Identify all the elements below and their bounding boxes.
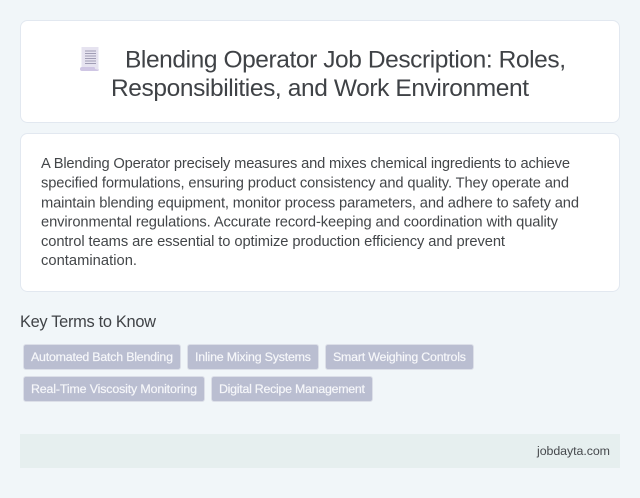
text block: description: environmental regulations. Accurate record-keeping and coordination with quality xyxy=(41,214,559,230)
tag: real-time viscosity monitoring xyxy=(24,376,204,402)
tag: automated batch blending xyxy=(24,344,180,370)
tag: digital recipe management xyxy=(212,376,372,402)
title: Blending Operator Job Description: Roles, xyxy=(125,46,566,74)
tag: real-time viscosity monitoring: Real-Time Viscosity Monitoring xyxy=(31,382,197,396)
text block: description: A Blending Operator precisely measures and mixes chemical ingredients to achieve xyxy=(41,156,570,172)
tag: smart weighing controls xyxy=(326,344,474,370)
title xyxy=(111,46,566,102)
footer: jobdayta.com xyxy=(536,444,610,458)
text block: description xyxy=(41,156,579,269)
tag: digital recipe management: Digital Recipe Management xyxy=(219,382,366,396)
footer xyxy=(20,434,620,468)
panel: description xyxy=(20,134,620,292)
panel: title card xyxy=(20,20,620,122)
tag: inline mixing systems xyxy=(188,344,318,370)
heading: key terms: Key Terms to Know xyxy=(20,313,156,331)
tag: automated batch blending: Automated Batch Blending xyxy=(31,350,173,364)
tags: key terms xyxy=(24,344,474,402)
text block: description: specified formulations, ensuring product consistency and quality. They operate and xyxy=(41,176,569,192)
text block: description: control teams are essential to optimize production efficiency and prevent xyxy=(41,234,505,250)
text block: description: maintain blending equipment, monitor process parameters, and adhere to safety and xyxy=(41,196,579,212)
tag: smart weighing controls: Smart Weighing Controls xyxy=(333,350,466,364)
icon: document scroll xyxy=(80,47,99,71)
title: Responsibilities, and Work Environment xyxy=(111,75,529,102)
tag: inline mixing systems: Inline Mixing Systems xyxy=(195,350,311,364)
text block: description: contamination. xyxy=(41,253,137,269)
